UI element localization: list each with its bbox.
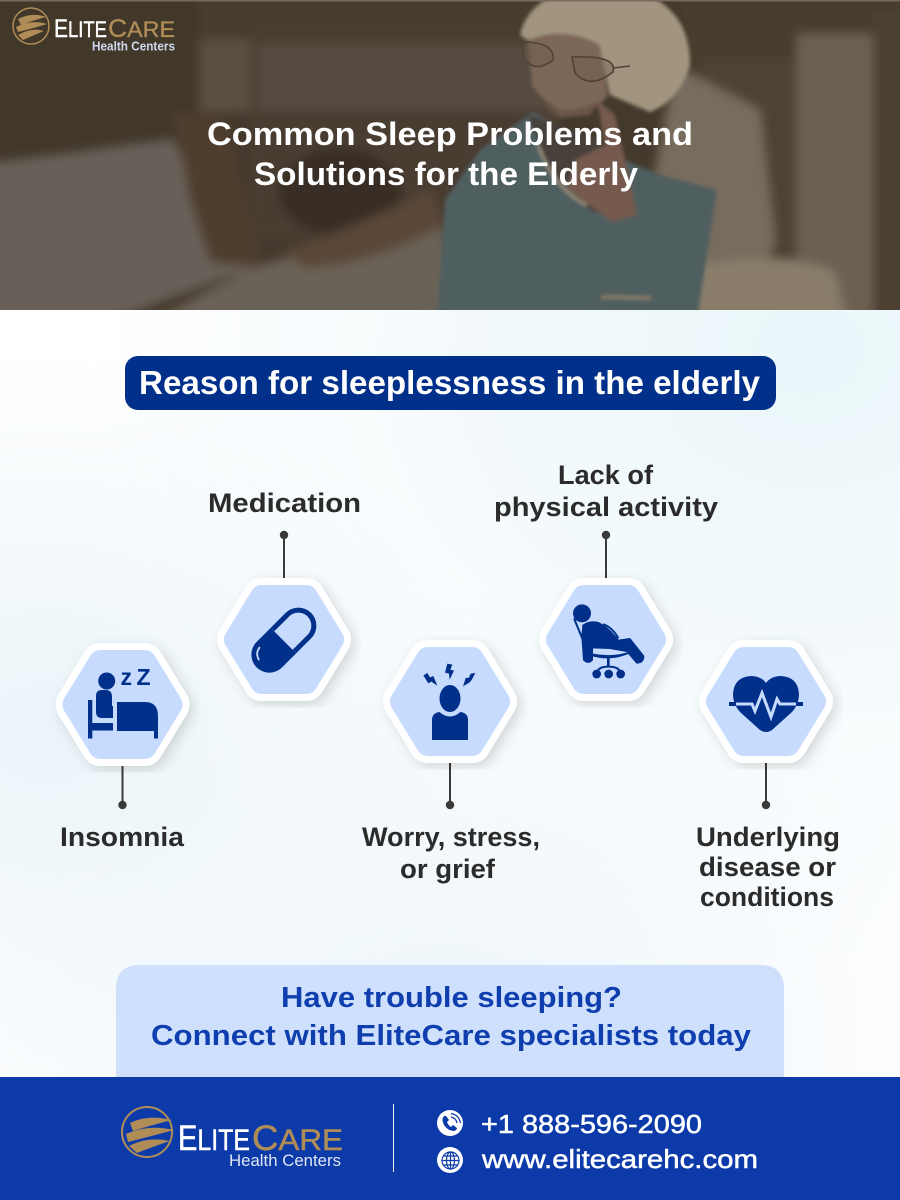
call to action panel: Connect with EliteCare specialists today (151, 1020, 751, 1052)
phone number: +1 888-596-2090 (481, 1109, 702, 1139)
icon: heart disease hexagon (718, 659, 814, 744)
footer logo (122, 1107, 343, 1170)
label: worry, stress, or grief (362, 822, 540, 884)
footer logo: CARE (252, 1119, 343, 1158)
connector: worry (446, 760, 454, 809)
call to action panel (116, 965, 784, 1080)
footer logo: ELITE (178, 1119, 250, 1158)
footer divider (393, 1104, 394, 1172)
icon: insomnia hexagon (74, 662, 170, 747)
label: underlying disease or conditions (696, 822, 840, 912)
label: medication: Medication (208, 488, 361, 518)
label: worry, stress, or grief: or grief (400, 854, 496, 884)
footer band (0, 1077, 900, 1200)
call to action panel: Have trouble sleeping? (281, 982, 622, 1014)
title: Solutions for the Elderly (254, 156, 638, 192)
title (207, 116, 693, 192)
website: www.elitecarehc.com (481, 1144, 758, 1174)
icon: phone (437, 1110, 463, 1136)
section heading pill: Reason for sleeplessness in the elderly (139, 364, 761, 401)
icon: medication hexagon (236, 597, 332, 682)
label: lack of physical activity (494, 460, 718, 522)
label: underlying disease or conditions: Underlying (696, 822, 840, 852)
header logo: ELITE (54, 15, 107, 43)
connector: lack of activity (602, 531, 610, 582)
page background (0, 310, 900, 1080)
header logo: Health Centers (92, 40, 175, 54)
section heading pill (125, 356, 776, 410)
label: worry, stress, or grief: Worry, stress, (362, 822, 540, 852)
logo emblem (13, 8, 49, 44)
icon: insomnia hexagon: z (120, 664, 132, 690)
label: lack of physical activity: Lack of (558, 460, 654, 490)
label: underlying disease or conditions: disease or (699, 852, 837, 882)
label: underlying disease or conditions: conditions (700, 882, 834, 912)
connector: underlying disease (762, 760, 770, 809)
title: Common Sleep Problems and (207, 116, 693, 152)
icon: worry hexagon (402, 659, 498, 744)
icon: globe (437, 1147, 463, 1173)
header logo (13, 8, 175, 54)
icon: insomnia hexagon: Z (136, 664, 151, 690)
connector: insomnia (118, 762, 127, 809)
header logo: CARE (108, 15, 175, 43)
label: lack of physical activity: physical activity (494, 492, 718, 522)
footer logo: Health Centers (229, 1152, 341, 1170)
connector: medication (280, 531, 288, 582)
label: insomnia: Insomnia (60, 822, 185, 852)
header photo: elderly woman awake in bed (0, 0, 900, 310)
icon: lack of physical activity hexagon (558, 597, 654, 682)
